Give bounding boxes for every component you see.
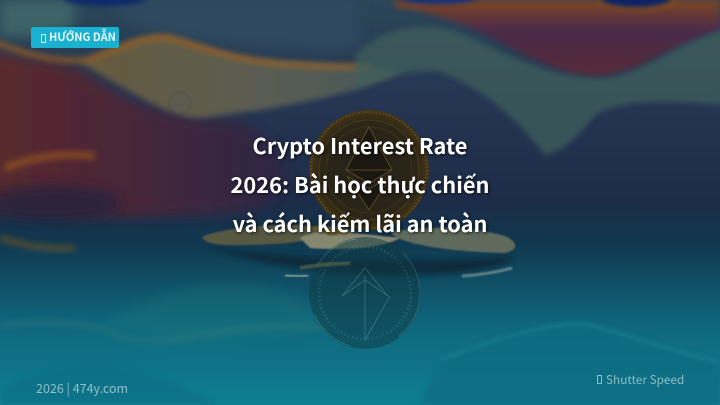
right top red region xyxy=(395,0,720,76)
title: và cách kiếm lãi an toàn xyxy=(233,208,487,239)
shadow band under coins xyxy=(205,245,515,275)
lower waves xyxy=(100,283,322,342)
top dark blue ellipses xyxy=(63,0,147,6)
coin pile highlights in reflection xyxy=(285,275,308,276)
dark patch under orange streak xyxy=(0,185,120,221)
title: 2026: Bài học thực chiến xyxy=(231,169,489,200)
badge: category tag xyxy=(31,27,119,48)
badge: category tag: HƯỚNG DẪN xyxy=(49,29,116,45)
title: Crypto Interest Rate xyxy=(253,130,467,161)
icon: coin pile xyxy=(202,225,515,253)
photo credit: Shutter Speed xyxy=(606,371,684,388)
top-left teal wash xyxy=(0,0,360,49)
orange edge xyxy=(0,37,370,67)
title xyxy=(231,130,490,239)
right grey-teal band xyxy=(355,27,720,155)
beige band xyxy=(80,35,400,118)
small circle smudge xyxy=(169,92,191,114)
footer: year and site: 2026 | 474y.com xyxy=(36,378,128,397)
icon: coin reflection xyxy=(309,237,421,349)
left red region xyxy=(0,48,286,217)
icon: coin xyxy=(309,110,429,230)
